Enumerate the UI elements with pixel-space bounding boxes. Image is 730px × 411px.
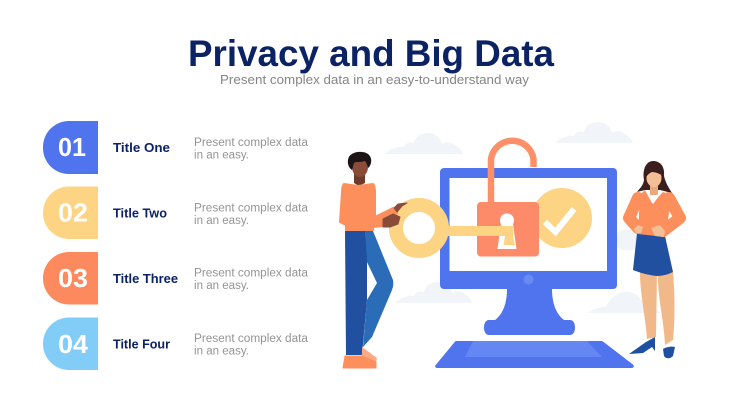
text block 3: Present complex data [194,268,309,280]
monitor stand [484,289,575,335]
illustration: man hands on key [383,203,407,227]
woman hair fringe [645,166,663,178]
padlock shackle [491,141,534,204]
number tab 02 [43,186,98,239]
man shirt [340,184,397,230]
keyboard [436,342,633,367]
text block 2: Present complex data [194,202,309,214]
woman hands [634,225,665,237]
key shaft [448,226,513,236]
text block 4: Present complex data [194,333,309,345]
check badge [532,188,592,248]
text block 2: in an easy. [194,215,249,227]
check mark [545,209,574,232]
number 04: 04 [58,329,89,359]
title: Privacy and Big Data [188,33,554,74]
illustration: computer monitor [436,168,633,367]
text block 1: Present complex data [194,137,309,149]
woman collar [645,190,663,204]
number 02: 02 [58,198,88,228]
keyhole [498,213,516,249]
woman hair [637,161,672,193]
subtitle: Present complex data in an easy-to-understand way [220,72,530,87]
illustration: key [396,205,515,251]
key ring [396,205,442,251]
list item 04 [43,318,309,370]
padlock body [477,202,539,256]
illustration: clouds [385,122,660,313]
text block 3: in an easy. [194,280,249,292]
illustration: woman [629,161,680,358]
man neck and head [354,172,365,186]
number tab 01 [43,121,98,174]
heading: Title One: Title One [113,140,170,155]
number tab 04 [43,318,98,370]
woman skirt [633,233,673,276]
number 03: 03 [58,263,88,293]
woman shoes [629,337,655,354]
number tab 03 [43,252,98,304]
text block 4: in an easy. [194,346,249,358]
illustration: padlock and check badge [477,141,592,256]
woman face and neck [650,182,658,195]
woman arms [629,198,680,231]
number 01: 01 [58,132,86,162]
monitor frame [440,168,617,289]
heading: Title Three: Title Three [113,271,178,286]
woman top [638,190,672,237]
heading: Title Two: Title Two [113,206,167,220]
heading: Title Four: Title Four [113,336,170,352]
man shoes [362,347,377,362]
key bit [504,236,515,245]
monitor power button [524,274,534,284]
text block 1: in an easy. [194,150,249,162]
list item 02 [43,186,309,239]
illustration: man holding key [340,152,397,368]
monitor screen [450,178,607,271]
keyboard highlight [465,341,602,357]
list item 01 [43,121,309,174]
man legs [363,231,393,347]
man hair [348,152,371,170]
woman legs [640,272,657,339]
list item 03 [43,252,309,304]
